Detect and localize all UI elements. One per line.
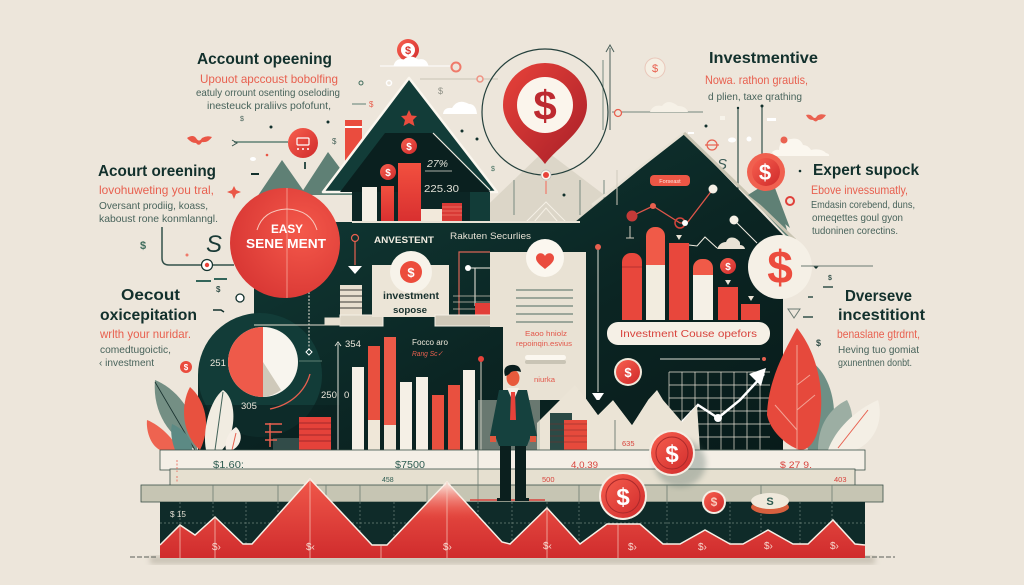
house bar chart: $ (385, 168, 391, 179)
card: investment sopose (372, 251, 449, 317)
coin: top right: $ (759, 160, 771, 185)
big red circle badge: SENE MENT (246, 237, 326, 251)
small markers right side: $ (816, 338, 821, 348)
card: investment sopose: investment (383, 290, 440, 302)
text block: expert support: Expert supock (813, 162, 919, 179)
connector lines and red stack (435, 252, 500, 326)
red mountain area chart (130, 479, 895, 558)
pill: investment course: Investment Couse opefors (620, 328, 757, 340)
text block: account opening left (98, 163, 218, 225)
text block: diverse investment: Dverseve (845, 288, 912, 305)
pie dial: 251 (210, 358, 226, 369)
red mountain area chart: $‹ (306, 542, 315, 553)
document panel: Eaoo hniolz (525, 329, 567, 338)
coin: lower right panel (614, 358, 642, 386)
right house chart: pill label (650, 175, 690, 186)
soft base shadow (150, 556, 875, 564)
text block: investmentive: Nowa. rathon grautis, (705, 73, 808, 87)
red mountain area chart: $› (698, 542, 707, 553)
decorations top right: $ (652, 63, 658, 75)
decorations top right (606, 45, 829, 205)
decorations top center: $ (491, 166, 495, 173)
big dollar circle: $ (767, 241, 793, 293)
text block: account opening left: lovohuweting you tral, (99, 183, 214, 197)
text block: investmentive (705, 50, 818, 103)
text block: account opening top: Upouot apccoust bobolfing (200, 72, 338, 86)
coin: small: $ (711, 495, 718, 509)
text block: diverse investment: benaslane gtrdrnt, (837, 327, 920, 341)
beige ledge (254, 318, 340, 325)
decorations left: $ (216, 285, 221, 294)
text block: investmentive: Investmentive (709, 50, 818, 67)
decorations top center (352, 57, 604, 216)
tiered platform: $ 27 9. (780, 460, 812, 470)
coin: platform bottom (599, 472, 647, 520)
document panel: repoinqin.esvius (516, 339, 572, 348)
decoration: red column with stripes (345, 120, 362, 162)
center heading labels (374, 231, 531, 246)
text block: occount oxicepitation: comedtugoictic, (100, 344, 171, 356)
text block: expert support (811, 162, 919, 237)
decorations top center: $ (369, 100, 374, 109)
right bar chart: $ (725, 262, 731, 273)
decoration: small cloud (443, 102, 477, 114)
small markers right side: $ (828, 275, 832, 282)
decorations left (140, 116, 337, 312)
card: investment sopose: $ (407, 265, 415, 280)
bottom dark chart band (160, 502, 865, 558)
big dollar circle (748, 235, 812, 299)
text block: diverse investment: Heving tuo gomiat (838, 344, 919, 356)
red mountain area chart: $› (443, 542, 452, 553)
light panel behind person (478, 400, 540, 450)
house figures: 27% (426, 159, 448, 170)
coin: flat: S (766, 496, 774, 508)
tiered platform: $7500 (395, 460, 425, 471)
right line chart (617, 170, 757, 249)
house bar chart (362, 138, 462, 221)
coin: flat (751, 493, 789, 514)
text block: account opening top: eatuly orrount osenting oseloding (196, 87, 340, 99)
dark main body (198, 133, 783, 450)
coin: platform top: $ (665, 441, 679, 468)
text block: expert support: omeqettes goul gyon (812, 212, 903, 224)
tiered platform: $1.60: (213, 460, 244, 471)
pie dial: 305 (241, 401, 257, 412)
tiered platform: 403 (834, 475, 847, 484)
tiered platform: 500 (542, 475, 555, 484)
coin: platform bottom: $ (616, 484, 630, 511)
house figures: 225.30 (424, 183, 459, 195)
central bar chart: 250 (321, 390, 337, 401)
grid chart with rising arrow (660, 357, 770, 450)
text block: diverse investment: gxunentnen donbt. (838, 357, 912, 369)
background mountains (255, 150, 790, 240)
pill: investment course (607, 322, 770, 345)
mountain and stack near person: 635 (622, 439, 635, 448)
card: investment sopose: sopose (393, 305, 427, 316)
central bar chart: 0 (344, 390, 349, 401)
red mountain area chart: $‹ (543, 541, 552, 552)
icon: top map pin (397, 39, 419, 66)
red mountain area chart: $› (764, 541, 773, 552)
text block: diverse investment: incestitiont (838, 307, 925, 324)
text block: account opening left: Oversant prodiig, koass, (99, 200, 208, 212)
coin: lower right panel: $ (624, 365, 632, 380)
icon: red device badge (288, 128, 318, 158)
central bar chart: Focco aro (412, 338, 449, 347)
coin: platform top (649, 430, 706, 487)
big red circle badge: EASY (271, 222, 303, 236)
text block: occount oxicepitation: Oecout (121, 287, 180, 304)
red mountain area chart: $› (212, 542, 221, 553)
text block: account opening left: kaboust rone konmlanngl. (99, 213, 218, 225)
central bar chart (321, 337, 484, 450)
right leaves (767, 328, 880, 450)
left vertical arrow (592, 244, 604, 402)
text block: occount oxicepitation: wrlth your nuridar. (99, 327, 191, 341)
big map pin with circle (482, 49, 608, 222)
icon: heart (536, 253, 554, 269)
decorations left: $ (240, 116, 244, 123)
central bar chart: 354 (345, 339, 361, 350)
tiered platform (141, 450, 883, 502)
decorations top right: S (717, 156, 727, 173)
small markers right side (788, 266, 873, 348)
icon: star (401, 110, 417, 126)
bottom dark chart band: $ 15 (170, 510, 187, 519)
icon: top map pin: $ (405, 45, 411, 57)
house bar chart: $ (406, 142, 412, 153)
center heading labels: Rakuten Securlies (450, 231, 531, 242)
big red circle badge (230, 188, 340, 298)
decorations left: $ (332, 137, 337, 146)
left pin marker and coin stack (340, 234, 383, 326)
decorations left: $ (140, 240, 146, 252)
red mountain area chart: $› (628, 542, 637, 553)
tiered platform: 458 (382, 477, 394, 484)
chart bar stacks left of bars (265, 417, 331, 450)
pie dial (198, 285, 340, 450)
text block: expert support: tudoninen corectins. (812, 225, 898, 237)
mountain and stack near person (537, 385, 700, 450)
text block: account opening top: Account opeening (197, 51, 332, 68)
right roof outlines (592, 133, 795, 240)
person in suit (470, 365, 545, 501)
text block: expert support: Emdasin corebend, duns, (811, 199, 915, 211)
left leaves (147, 380, 241, 450)
document panel: niurka (534, 375, 556, 384)
text block: account opening top: inesteuck praliivs pofofunt, (207, 100, 331, 112)
coin: top right (747, 153, 790, 228)
text block: occount oxicepitation: ‹ investment (99, 357, 154, 369)
house figures (424, 159, 459, 195)
decorations left: S (206, 231, 222, 258)
center heading labels: ANVESTENT (374, 235, 434, 246)
left house (323, 78, 580, 223)
central bar chart: Rang Sc✓ (412, 349, 444, 358)
red mountain area chart: $› (830, 541, 839, 552)
tiered platform: 4,0.39 (571, 460, 598, 470)
text block: account opening left: Acourt oreening (98, 163, 216, 180)
decorations top center: $ (438, 86, 443, 96)
small coin left (180, 361, 192, 373)
big map pin with circle: $ (533, 82, 557, 129)
text block: occount oxicepitation (99, 287, 197, 369)
right bar chart (622, 227, 760, 320)
text block: diverse investment (837, 288, 925, 369)
coin: small (702, 490, 726, 514)
text block: investmentive: d plien, taxe qrathing (708, 91, 802, 103)
text block: account opening top (196, 51, 340, 112)
text block: expert support: Ebove invessumatly, (811, 183, 908, 197)
text block: occount oxicepitation: oxicepitation (100, 307, 197, 324)
document panel (490, 239, 586, 400)
small coin left: $ (184, 363, 189, 372)
right house chart: pill label: Forseast (659, 179, 681, 185)
